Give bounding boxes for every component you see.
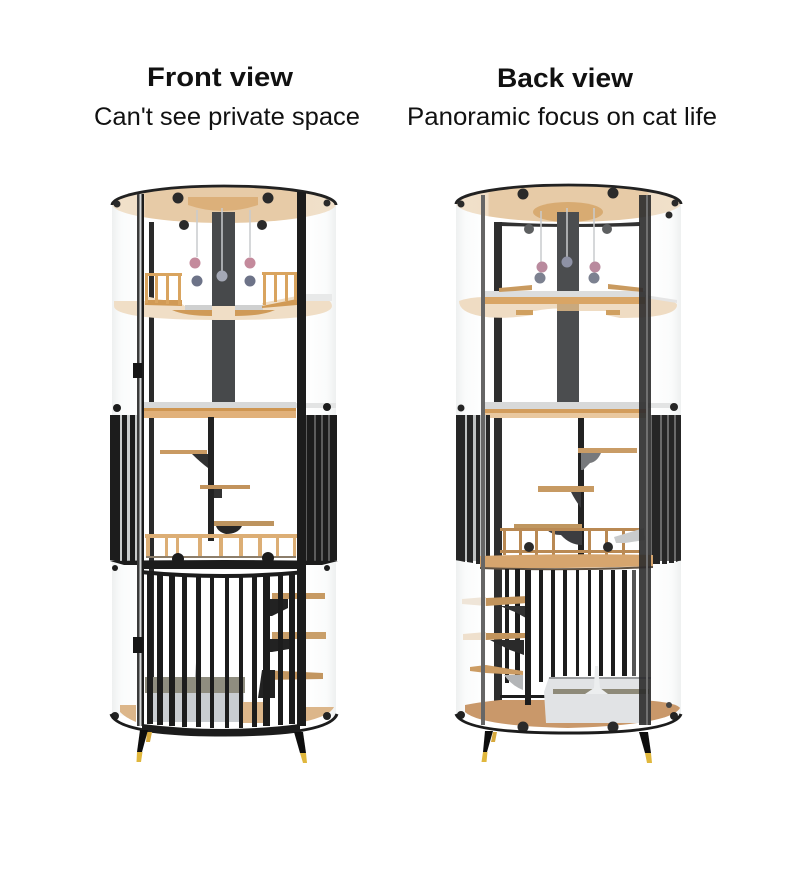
floor wood xyxy=(465,700,680,728)
scratching post xyxy=(212,212,235,402)
upper stairs xyxy=(160,450,274,534)
top wooden disc xyxy=(112,185,336,230)
rear cage bars xyxy=(500,569,636,698)
floor wood xyxy=(120,702,334,723)
upper shelf xyxy=(459,291,677,318)
middle shelf xyxy=(485,402,677,418)
hanging toys xyxy=(190,208,256,286)
scratching post xyxy=(557,212,579,402)
upper shelf xyxy=(114,294,332,320)
middle shelf xyxy=(144,402,336,418)
back posts xyxy=(494,222,502,702)
black side bars xyxy=(110,403,337,564)
upper railings xyxy=(499,284,643,292)
door latches xyxy=(133,363,143,653)
hanging toys xyxy=(534,208,600,284)
top wooden disc xyxy=(456,184,681,234)
glass shell xyxy=(112,204,336,716)
subheading: front view: Can't see private space xyxy=(94,103,360,131)
litter scoop xyxy=(585,666,608,694)
legs xyxy=(136,730,307,763)
litter box xyxy=(145,648,245,722)
wood deck xyxy=(480,542,653,570)
lower railing xyxy=(145,534,297,558)
spiral stair pole xyxy=(208,417,214,541)
black side bars xyxy=(456,403,681,564)
lower stairs xyxy=(462,570,531,705)
lower railing xyxy=(500,528,640,555)
litter scoop holder xyxy=(614,528,645,543)
cat cabinet: back view xyxy=(456,184,681,763)
upper stairs xyxy=(514,448,637,545)
base rim xyxy=(456,702,681,733)
rear legs and back post xyxy=(149,222,154,702)
subheading: back view: Panoramic focus on cat life xyxy=(407,103,717,131)
spiral stair pole xyxy=(578,418,584,563)
middle black band xyxy=(110,552,338,571)
upper railings xyxy=(145,272,297,305)
legs xyxy=(482,731,652,763)
base rim xyxy=(111,712,337,735)
cat cabinet: front view xyxy=(110,185,338,763)
heading: front view: Front view xyxy=(147,62,294,92)
posts xyxy=(481,195,651,725)
front cage bars xyxy=(140,570,306,728)
front door posts xyxy=(137,192,306,726)
litter box xyxy=(544,677,651,723)
heading: back view: Back view xyxy=(497,63,634,93)
lower stairs xyxy=(258,593,326,698)
glass shell xyxy=(456,203,681,715)
